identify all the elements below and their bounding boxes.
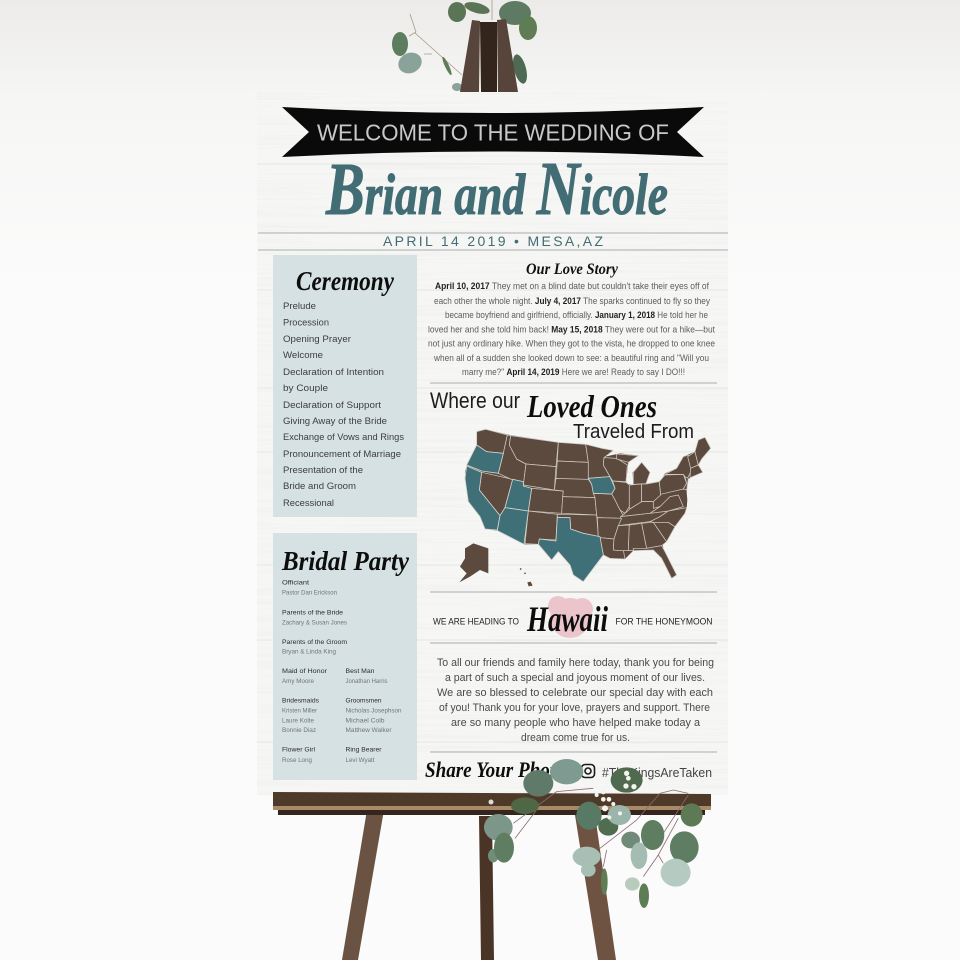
banner <box>282 107 704 157</box>
bridal party names: Levi Wyatt <box>346 757 375 764</box>
bridal party names: Matthew Walker <box>346 727 392 734</box>
banner text: WELCOME TO THE WEDDING OF <box>317 120 669 146</box>
ceremony order list: Exchange of Vows and Rings <box>283 432 404 443</box>
ceremony order list: Recessional <box>283 498 334 509</box>
share your photos line: #TheKingsAreTaken <box>602 766 712 780</box>
couple names: Brian and Nicole <box>325 147 668 231</box>
stems <box>513 788 688 877</box>
baby's breath flowers <box>595 771 637 819</box>
bridal party names: Ring Bearer <box>346 746 382 754</box>
love story text: not just any ordinary hike. When they got to the vista, he dropped to one knee <box>428 338 715 348</box>
bridal party names: Parents of the Groom <box>282 639 347 646</box>
date and place: APRIL 14 2019 • MESA,AZ <box>383 233 603 249</box>
header rules <box>258 233 728 250</box>
bridal party names: Groomsmen <box>346 698 382 704</box>
panel: ceremony <box>273 255 417 517</box>
love story text: became boyfriend and girlfriend, officially. January 1, 2018 He told her he <box>445 310 708 320</box>
easel ledge and legs <box>273 792 711 960</box>
ceremony order list: Giving Away of the Bride <box>283 416 387 427</box>
panel: bridal party <box>273 533 417 780</box>
share your photos line: Share Your Photos <box>425 757 572 782</box>
bridal party names: Bryan & Linda King <box>282 648 336 656</box>
honeymoon line: Hawaii <box>526 599 608 639</box>
map heading: Where our <box>430 388 520 413</box>
ceremony order list: Bride and Groom <box>283 481 356 492</box>
ceremony order list: Declaration of Support <box>283 400 381 411</box>
leaves <box>523 770 553 797</box>
ceremony order list <box>283 301 404 509</box>
thank you message: are so many people who have helped make today a <box>451 717 701 729</box>
highlighted states <box>465 445 615 582</box>
love story text: April 10, 2017 They met on a blind date but couldn't take their eyes off of <box>435 281 710 291</box>
bridal party names: Amy Moore <box>282 678 314 685</box>
ceremony order list: Procession <box>283 318 329 328</box>
section rules <box>430 383 717 752</box>
love story text <box>428 281 716 377</box>
bridal party names: Jonathan Harris <box>346 678 388 685</box>
bridal party names: Bridesmaids <box>282 698 320 704</box>
pink watercolor blob <box>548 596 593 638</box>
map heading: Loved Ones <box>526 388 657 424</box>
bridal party names: Officiant <box>282 580 309 586</box>
bridal party names <box>282 580 402 764</box>
honeymoon line <box>433 596 713 639</box>
bridal party names: Michael Colb <box>346 718 385 724</box>
bridal party names: Flower Girl <box>282 746 315 754</box>
ceremony order list: Pronouncement of Marriage <box>283 449 401 460</box>
honeymoon line: FOR THE HONEYMOON <box>616 616 713 628</box>
love story text: when all of a sudden she looked down to see: a beautiful ring and "Will you <box>433 353 709 363</box>
ceremony order list: Declaration of Intention <box>283 367 384 378</box>
thank you message <box>437 657 714 744</box>
eucalyptus garland <box>484 759 703 908</box>
bridal party names: Bonnie Diaz <box>282 727 317 734</box>
bridal party names: Rose Long <box>282 757 312 764</box>
Alaska <box>459 543 488 582</box>
ceremony heading: Ceremony <box>296 266 395 296</box>
icon: instagram <box>582 764 594 778</box>
ceremony order list: Opening Prayer <box>283 334 352 345</box>
bridal party names: Best Man <box>346 668 375 675</box>
thank you message: of you! Thank you for your love, prayers and support. There <box>439 702 710 714</box>
mainland underlay <box>465 429 711 582</box>
easel top with leaves <box>392 0 537 92</box>
ceremony order list: Prelude <box>283 301 316 312</box>
love story text: each other the whole night. July 4, 2017 The sparks continued to fly so they <box>434 296 711 306</box>
map heading <box>430 388 694 443</box>
love story text: marry me?" April 14, 2019 Here we are! Ready to say I DO!!! <box>462 367 685 377</box>
bridal party names: Zachary & Susan Jones <box>282 620 348 626</box>
Hawaii <box>520 568 533 586</box>
share your photos line <box>425 757 712 782</box>
brown states <box>477 429 711 578</box>
ceremony order list: Welcome <box>283 350 323 361</box>
bridal party names: Parents of the Bride <box>282 610 343 616</box>
bridal party names: Kristen Miller <box>282 708 318 714</box>
thank you message: dream come true for us. <box>521 732 630 744</box>
love story heading: Our Love Story <box>526 261 618 278</box>
honeymoon line: WE ARE HEADING TO <box>433 616 519 628</box>
bridal party names: Pastor Dan Erickson <box>282 590 337 596</box>
thank you message: a part of such a special and joyous moment of our lives. <box>445 672 705 684</box>
US map <box>459 429 711 586</box>
ceremony order list: by Couple <box>283 383 328 394</box>
bridal party names: Laure Kolte <box>282 718 314 724</box>
thank you message: We are so blessed to celebrate our special day with each <box>437 687 713 699</box>
love story text: loved her and she told him back! May 15, 2018 They were out for a hike—but <box>428 324 716 334</box>
bridal party heading: Bridal Party <box>281 546 410 576</box>
map heading: Traveled From <box>573 421 694 443</box>
bridal party names: Maid of Honor <box>282 668 328 675</box>
ceremony order list: Presentation of the <box>283 465 363 476</box>
sign board <box>257 92 728 795</box>
bridal party names: Nicholas Josephson <box>346 708 402 714</box>
thank you message: To all our friends and family here today, thank you for being <box>437 657 714 669</box>
